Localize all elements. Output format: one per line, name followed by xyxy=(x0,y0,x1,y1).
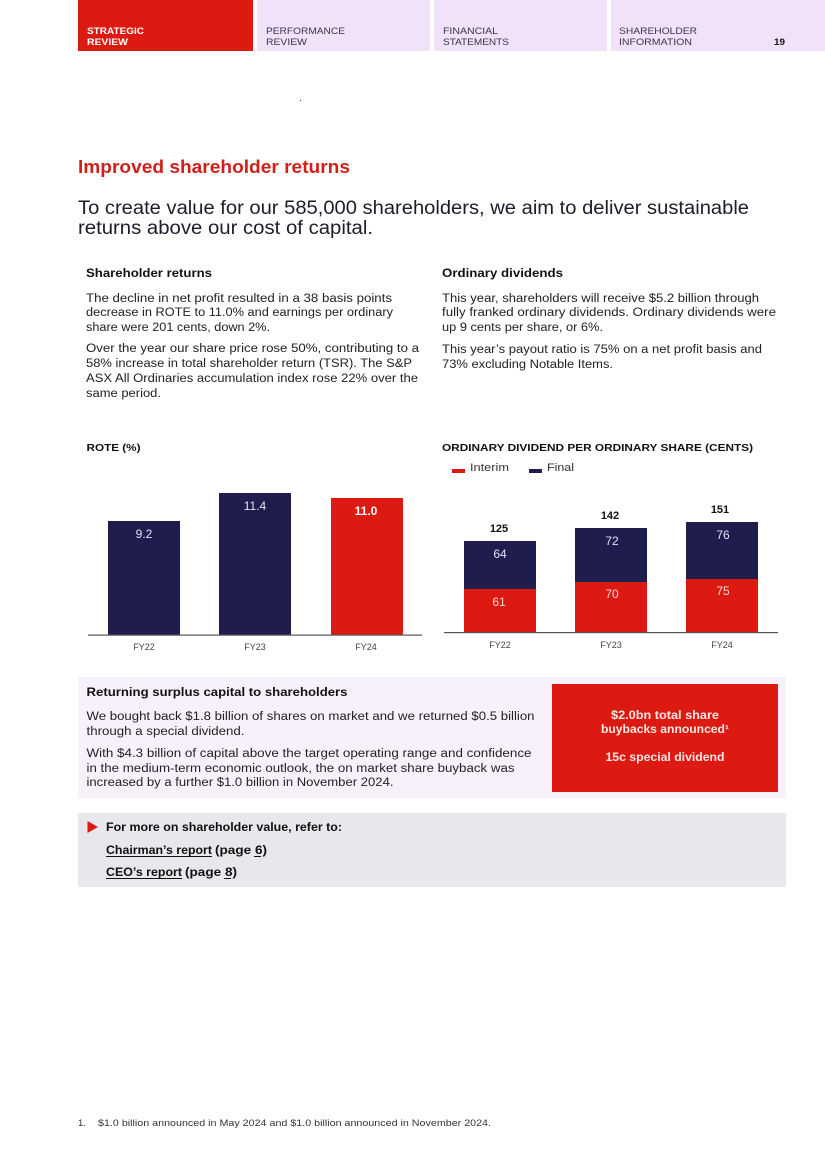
text block: ordinary dividends: This year, shareholders will receive $5.2 billion through xyxy=(442,293,759,305)
tab: financial statements xyxy=(434,0,607,51)
tab: strategic review: REVIEW xyxy=(87,37,128,48)
bar FY23: 11.4 xyxy=(244,499,267,513)
tab: financial statements: STATEMENTS xyxy=(443,37,509,48)
text block: shareholder returns: 58% increase in total shareholder return (TSR). The S&P xyxy=(86,358,412,370)
text block: shareholder returns: Shareholder returns xyxy=(86,266,212,280)
panel text: We bought back $1.8 billion of shares on market and we returned $0.5 billion xyxy=(86,711,534,723)
intro text: To create value for our 585,000 shareholders, we aim to deliver sustainable xyxy=(78,198,749,219)
link: CEO's report: (page 8) xyxy=(185,867,237,879)
stack FY24: 151 xyxy=(711,504,729,516)
legend: Final xyxy=(547,462,574,474)
bar FY23 xyxy=(219,493,291,652)
navigation tabs xyxy=(78,0,825,51)
text block: shareholder returns: ASX All Ordinaries accumulation index rose 22% over the xyxy=(86,373,418,385)
bar FY24: FY24 xyxy=(355,642,377,652)
tab: financial statements: FINANCIAL xyxy=(443,26,498,37)
bar FY24 xyxy=(331,498,403,652)
stack FY24: 75 xyxy=(716,584,730,598)
stack FY24: FY24 xyxy=(711,640,733,650)
tab: strategic review: STRATEGIC xyxy=(87,26,144,37)
panel text: in the medium-term economic outlook, the on market share buyback was xyxy=(86,763,515,775)
stack FY24 xyxy=(686,504,758,650)
chart title: ORDINARY DIVIDEND PER ORDINARY SHARE (CENTS) xyxy=(442,442,753,454)
stack FY22: 64 xyxy=(493,547,507,561)
stack FY22: 125 xyxy=(490,523,508,535)
bar FY24: 11.0 xyxy=(355,504,378,518)
callout: buybacks and special dividend: 15c special dividend xyxy=(606,752,724,764)
panel text: With $4.3 billion of capital above the target operating range and confidence xyxy=(86,748,532,760)
text block: ordinary dividends: 73% excluding Notable Items. xyxy=(442,359,613,371)
text block: shareholder returns: same period. xyxy=(86,388,161,400)
page number: 19 xyxy=(774,37,785,48)
legend xyxy=(452,462,574,474)
legend: Interim xyxy=(470,462,509,474)
text block: shareholder returns xyxy=(86,266,420,400)
link: chairman's report xyxy=(106,845,267,857)
text block: ordinary dividends: Ordinary dividends xyxy=(442,266,563,280)
text block: shareholder returns: Over the year our share price rose 50%, contributing to a xyxy=(86,343,420,355)
footnote: 1. xyxy=(78,1118,86,1129)
tab: performance review xyxy=(257,0,430,51)
tab: strategic review xyxy=(78,0,253,51)
stack FY23 xyxy=(575,510,647,650)
callout: buybacks and special dividend: buybacks announced¹ xyxy=(601,724,729,736)
text block: ordinary dividends: fully franked ordinary dividends. Ordinary dividends were xyxy=(442,307,776,319)
panel text xyxy=(86,711,534,789)
link: CEO's report xyxy=(106,867,237,879)
link: chairman's report: Chairman’s report xyxy=(106,845,212,857)
stack FY23: 142 xyxy=(601,510,619,522)
panel text: through a special dividend. xyxy=(86,726,244,738)
intro text: returns above our cost of capital. xyxy=(78,218,373,239)
text block: ordinary dividends xyxy=(442,266,776,371)
stack FY23: FY23 xyxy=(600,640,622,650)
tab: shareholder information: SHAREHOLDER xyxy=(619,26,697,37)
stack FY22: FY22 xyxy=(489,640,511,650)
bar FY22 xyxy=(108,521,180,652)
bar chart: ROTE xyxy=(86,442,422,652)
chart title: ROTE (%) xyxy=(86,442,140,454)
text block: ordinary dividends: This year’s payout ratio is 75% on a net profit basis and xyxy=(442,344,762,356)
title: Improved shareholder returns xyxy=(78,157,350,177)
link: chairman's report: (page 6) xyxy=(215,845,267,857)
tab: performance review: PERFORMANCE xyxy=(266,26,345,37)
callout: buybacks and special dividend: $2.0bn total share xyxy=(611,710,719,722)
tab: shareholder information: INFORMATION xyxy=(619,37,692,48)
stack FY22 xyxy=(464,523,536,650)
text block: shareholder returns: share were 201 cents, down 2%. xyxy=(86,322,270,334)
text block: shareholder returns: The decline in net profit resulted in a 38 basis points xyxy=(86,293,392,305)
callout: buybacks and special dividend xyxy=(552,684,778,792)
footnote: $1.0 billion announced in May 2024 and $1.0 billion announced in November 2024. xyxy=(98,1118,491,1129)
bar FY23: FY23 xyxy=(244,642,266,652)
intro text xyxy=(78,198,749,239)
panel: returning surplus capital xyxy=(78,677,786,798)
stacked bar chart: ordinary dividend per share xyxy=(442,442,778,650)
panel heading: Returning surplus capital to shareholders xyxy=(86,685,348,699)
icon: red arrow xyxy=(88,821,98,833)
stack FY23: 70 xyxy=(605,587,619,601)
bar FY22: FY22 xyxy=(133,642,155,652)
stack FY22: 61 xyxy=(492,595,506,609)
tab: shareholder information xyxy=(611,0,825,51)
text block: ordinary dividends: up 9 cents per share, or 6%. xyxy=(442,322,603,334)
link: CEO's report: CEO’s report xyxy=(106,867,182,879)
reference heading: For more on shareholder value, refer to: xyxy=(106,822,342,834)
panel text: increased by a further $1.0 billion in November 2024. xyxy=(86,777,394,789)
text block: shareholder returns: decrease in ROTE to 11.0% and earnings per ordinary xyxy=(86,307,393,319)
stack FY23: 72 xyxy=(605,534,619,548)
panel: further reading xyxy=(78,813,786,887)
tab: performance review: REVIEW xyxy=(266,37,307,48)
bar FY22: 9.2 xyxy=(136,527,153,541)
stack FY24: 76 xyxy=(716,528,730,542)
